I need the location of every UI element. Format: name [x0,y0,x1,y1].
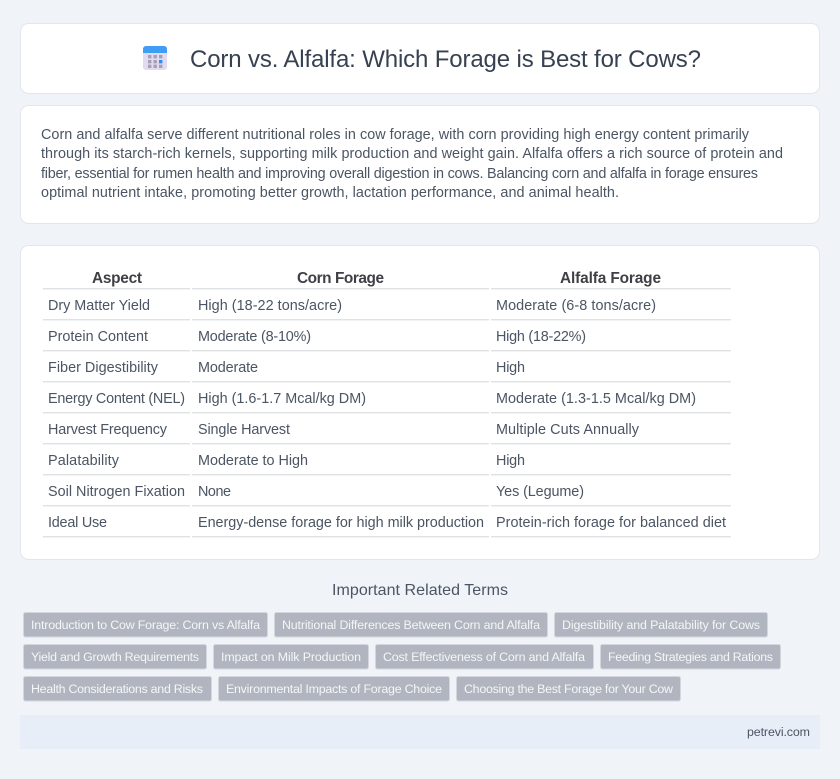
tag [456,676,680,701]
panel: header [20,24,820,94]
row: harvest frequency: Multiple Cuts Annually [496,422,640,438]
row: ideal use: Protein-rich forage for balanced diet [496,515,726,531]
footer [20,715,820,749]
tag: Health Considerations and Risks [31,682,203,696]
row: dry matter yield: High (18-22 tons/acre) [198,298,342,314]
row: dry matter yield [48,298,656,314]
panel: introduction [20,106,820,224]
tag: Cost Effectiveness of Corn and Alfalfa [383,650,585,664]
tag: Introduction to Cow Forage: Corn vs Alfalfa [31,618,260,632]
row: ideal use [48,515,726,531]
row: fiber digestibility: Fiber Digestibility [48,360,159,376]
table header: Aspect [92,270,142,287]
tag: Environmental Impacts of Forage Choice [226,682,442,696]
tag: Impact on Milk Production [221,650,361,664]
row: fiber digestibility: High [496,360,525,376]
row: harvest frequency: Single Harvest [198,422,290,438]
tag: Nutritional Differences Between Corn and Alfalfa [282,618,540,632]
table row lines [43,288,731,537]
row: energy content [48,391,696,407]
row: palatability: Palatability [48,453,120,469]
intro paragraph: Corn and alfalfa serve different nutritional roles in cow forage, with corn providing high energy content primarily [41,127,750,143]
row: soil nitrogen fixation: Yes (Legume) [496,484,584,500]
row: palatability: High [496,453,525,469]
row: energy content: High (1.6-1.7 Mcal/kg DM) [198,391,366,407]
intro paragraph: optimal nutrient intake, promoting better growth, lactation performance, and animal health. [41,185,619,201]
heading: important related terms: Important Related Terms [332,582,508,599]
intro paragraph: through its starch-rich kernels, supporting milk production and weight gain. Alfalfa offers a rich source of protein and [41,146,783,162]
row: palatability [48,453,525,469]
intro paragraph: fiber, essential for rumen health and improving overall digestion in cows. Balancing corn and alfalfa in forage ensures [41,166,758,182]
row: dry matter yield: Dry Matter Yield [48,298,150,314]
row: energy content: Energy Content (NEL) [48,391,185,407]
row: fiber digestibility [48,360,525,376]
row: harvest frequency: Harvest Frequency [48,422,168,438]
row: energy content: Moderate (1.3-1.5 Mcal/kg DM) [496,391,696,407]
tag [214,644,368,669]
tag [218,676,450,701]
tag [24,676,212,701]
row: fiber digestibility: Moderate [198,360,258,376]
row: ideal use: Energy-dense forage for high milk production [198,515,484,531]
row: protein content: Moderate (8-10%) [198,329,311,345]
intro paragraph [41,127,783,201]
tag [24,612,268,637]
row: harvest frequency [48,422,640,438]
row: protein content: High (18-22%) [496,329,586,345]
tag: Feeding Strategies and Rations [608,650,773,664]
tag [24,644,206,669]
tag: Digestibility and Palatability for Cows [562,618,760,632]
table header: Corn Forage [297,270,384,287]
row: ideal use: Ideal Use [48,515,107,531]
related term tags [24,612,780,701]
row: soil nitrogen fixation: Soil Nitrogen Fixation [48,484,185,500]
panel: comparison table [20,246,820,560]
row: protein content [48,329,586,345]
tag [554,612,768,637]
table header: Alfalfa Forage [560,270,661,287]
icon: calendar [143,46,167,70]
title: Corn vs. Alfalfa: Which Forage is Best for Cows? [190,46,701,73]
row: palatability: Moderate to High [198,453,308,469]
row: soil nitrogen fixation: None [198,484,231,500]
tag [600,644,780,669]
tag: Yield and Growth Requirements [31,650,199,664]
row: dry matter yield: Moderate (6-8 tons/acre) [496,298,656,314]
tag: Choosing the Best Forage for Your Cow [464,682,673,696]
tag [274,612,548,637]
footer source text: petrevi.com [747,725,810,739]
row: soil nitrogen fixation [48,484,584,500]
tag [376,644,594,669]
table header [92,270,661,287]
row: protein content: Protein Content [48,329,148,345]
